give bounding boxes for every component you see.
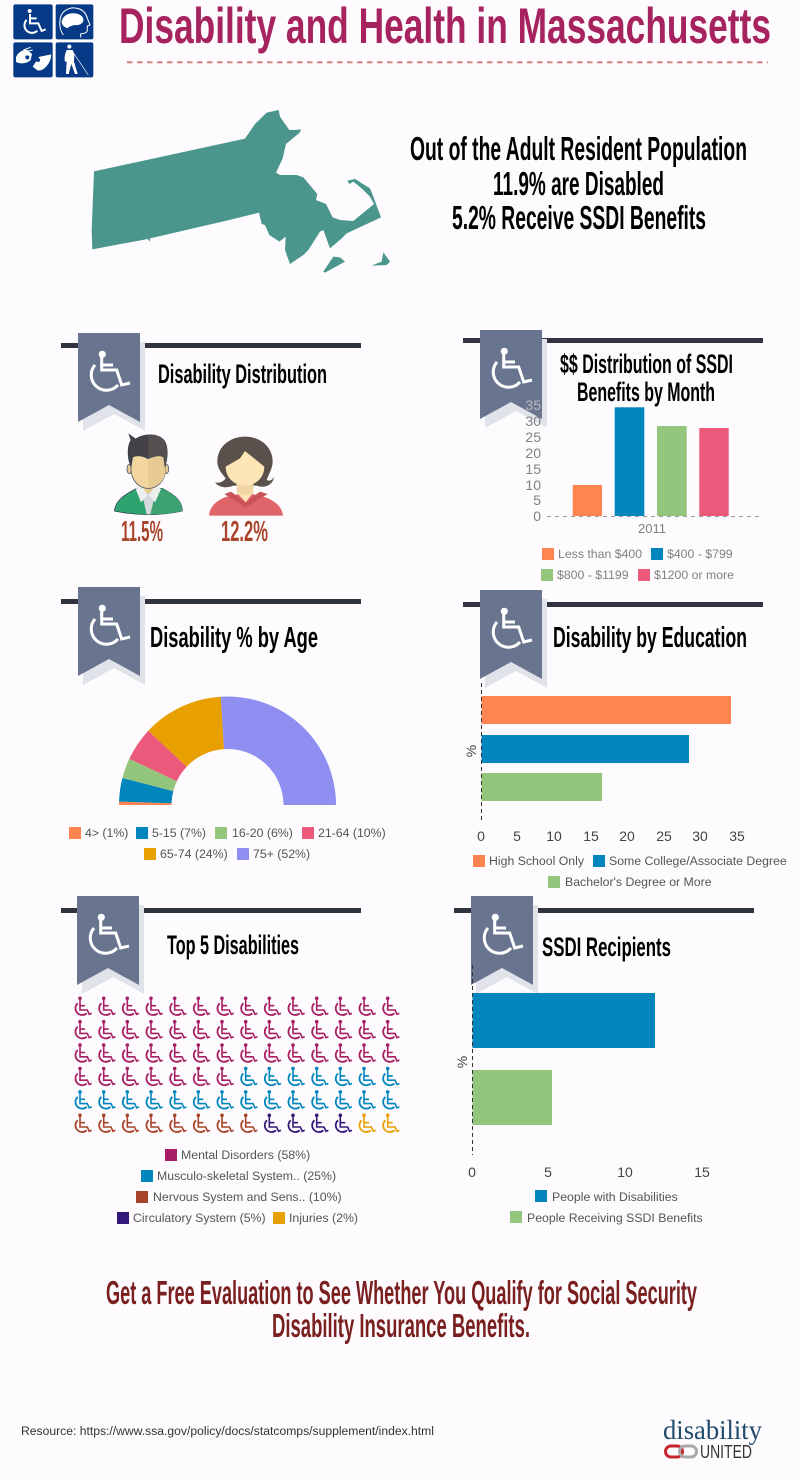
bar chart: SSDI recipients: 15 <box>694 1164 710 1180</box>
bar chart: benefit amounts: 10 <box>525 477 541 493</box>
legend: top 5 disabilities <box>117 1148 358 1225</box>
legend: age groups: 4> (1%) <box>85 826 128 840</box>
legend: top 5 disabilities: Nervous System and Sens.. (10%) <box>153 1190 342 1204</box>
legend: benefit amounts <box>541 547 734 582</box>
pictogram: 84 wheelchair icons <box>75 996 399 1132</box>
panel: SSDI recipients <box>454 896 754 1225</box>
bar chart: benefit amounts: 20 <box>525 445 541 461</box>
heading: SSDI benefit distribution <box>560 349 733 407</box>
panel: disability distribution <box>61 333 361 548</box>
logo: disability united: UNITED <box>700 1442 752 1462</box>
icon: woman <box>209 437 283 516</box>
call to action <box>106 1274 697 1344</box>
bar chart: education: 10 <box>546 828 562 844</box>
bar chart: SSDI recipients: 0 <box>468 1164 476 1180</box>
logo: disability united: disability <box>663 1415 762 1445</box>
legend: age groups: 16-20 (6%) <box>232 826 293 840</box>
legend: age groups <box>69 826 386 861</box>
headline statistics <box>410 130 747 236</box>
bar chart: benefit amounts <box>525 397 760 536</box>
legend: age groups: 21-64 (10%) <box>318 826 386 840</box>
half-donut chart: age groups <box>119 696 336 805</box>
bar chart: education: 25 <box>656 828 672 844</box>
bar chart: SSDI recipients <box>454 965 710 1180</box>
legend: SSDI recipients: People with Disabilities <box>552 1190 678 1204</box>
legend: age groups: 5-15 (7%) <box>152 826 206 840</box>
bar chart: education: 20 <box>619 828 635 844</box>
bar chart: education: 30 <box>692 828 708 844</box>
heading: disability distribution: Disability Distribution <box>158 359 327 389</box>
bar chart: SSDI recipients: 5 <box>544 1164 552 1180</box>
bar chart: education: 15 <box>583 828 599 844</box>
bar chart: education: 5 <box>513 828 521 844</box>
bar chart: benefit amounts: 30 <box>525 413 541 429</box>
heading: SSDI recipients: SSDI Recipients <box>542 932 671 962</box>
bar chart: education: % <box>463 745 479 757</box>
legend: education <box>473 854 787 889</box>
bar chart: education: 35 <box>729 828 745 844</box>
legend: benefit amounts: $800 - $1199 <box>557 568 629 582</box>
legend: age groups: 65-74 (24%) <box>160 847 228 861</box>
source citation: Resource: https://www.ssa.gov/policy/docs/statcomps/supplement/index.html <box>21 1426 434 1438</box>
bar chart: benefit amounts: 15 <box>525 461 541 477</box>
bar chart: benefit amounts: 5 <box>533 492 541 508</box>
call to action: Disability Insurance Benefits. <box>272 1307 530 1344</box>
icon: man <box>114 434 182 515</box>
panel: disability by age <box>61 587 386 861</box>
bar chart: education: 0 <box>477 828 485 844</box>
bar chart: SSDI recipients: % <box>454 1056 470 1068</box>
headline statistics: 11.9% are Disabled <box>493 165 664 202</box>
stat: men 11.5%: 11.5% <box>121 516 163 548</box>
legend: top 5 disabilities: Musculo-skeletal System.. (25%) <box>157 1169 336 1183</box>
legend: education: High School Only <box>489 854 585 868</box>
bar chart: SSDI recipients: 10 <box>617 1164 633 1180</box>
map of Massachusetts <box>92 110 390 273</box>
legend: age groups: 75+ (52%) <box>253 847 310 861</box>
panel: top 5 disabilities <box>61 896 399 1225</box>
bar chart: benefit amounts: 25 <box>525 429 541 445</box>
legend: top 5 disabilities: Circulatory System (5%) <box>133 1211 266 1225</box>
legend: SSDI recipients <box>510 1190 703 1225</box>
heading: top 5 disabilities: Top 5 Disabilities <box>167 930 299 960</box>
panel: disability by education <box>463 590 787 889</box>
legend: benefit amounts: $400 - $799 <box>667 547 733 561</box>
legend: SSDI recipients: People Receiving SSDI Benefits <box>527 1211 703 1225</box>
bar chart: benefit amounts: 35 <box>525 397 541 413</box>
bar chart: benefit amounts: 2011 <box>638 521 666 536</box>
bar chart: benefit amounts: 0 <box>533 508 541 524</box>
legend: benefit amounts: $1200 or more <box>654 568 734 582</box>
stat: women 12.2%: 12.2% <box>221 516 268 548</box>
legend: benefit amounts: Less than $400 <box>558 547 642 561</box>
legend: education: Bachelor's Degree or More <box>565 875 712 889</box>
bar chart: education <box>463 683 745 844</box>
legend: top 5 disabilities: Mental Disorders (58%) <box>181 1148 310 1162</box>
logo: disability united <box>663 1415 762 1462</box>
panel: SSDI benefit distribution <box>463 330 763 582</box>
legend: education: Some College/Associate Degree <box>609 854 787 868</box>
heading: disability by age: Disability % by Age <box>150 622 318 654</box>
legend: top 5 disabilities: Injuries (2%) <box>289 1211 358 1225</box>
logo: four accessibility icons <box>13 4 93 77</box>
